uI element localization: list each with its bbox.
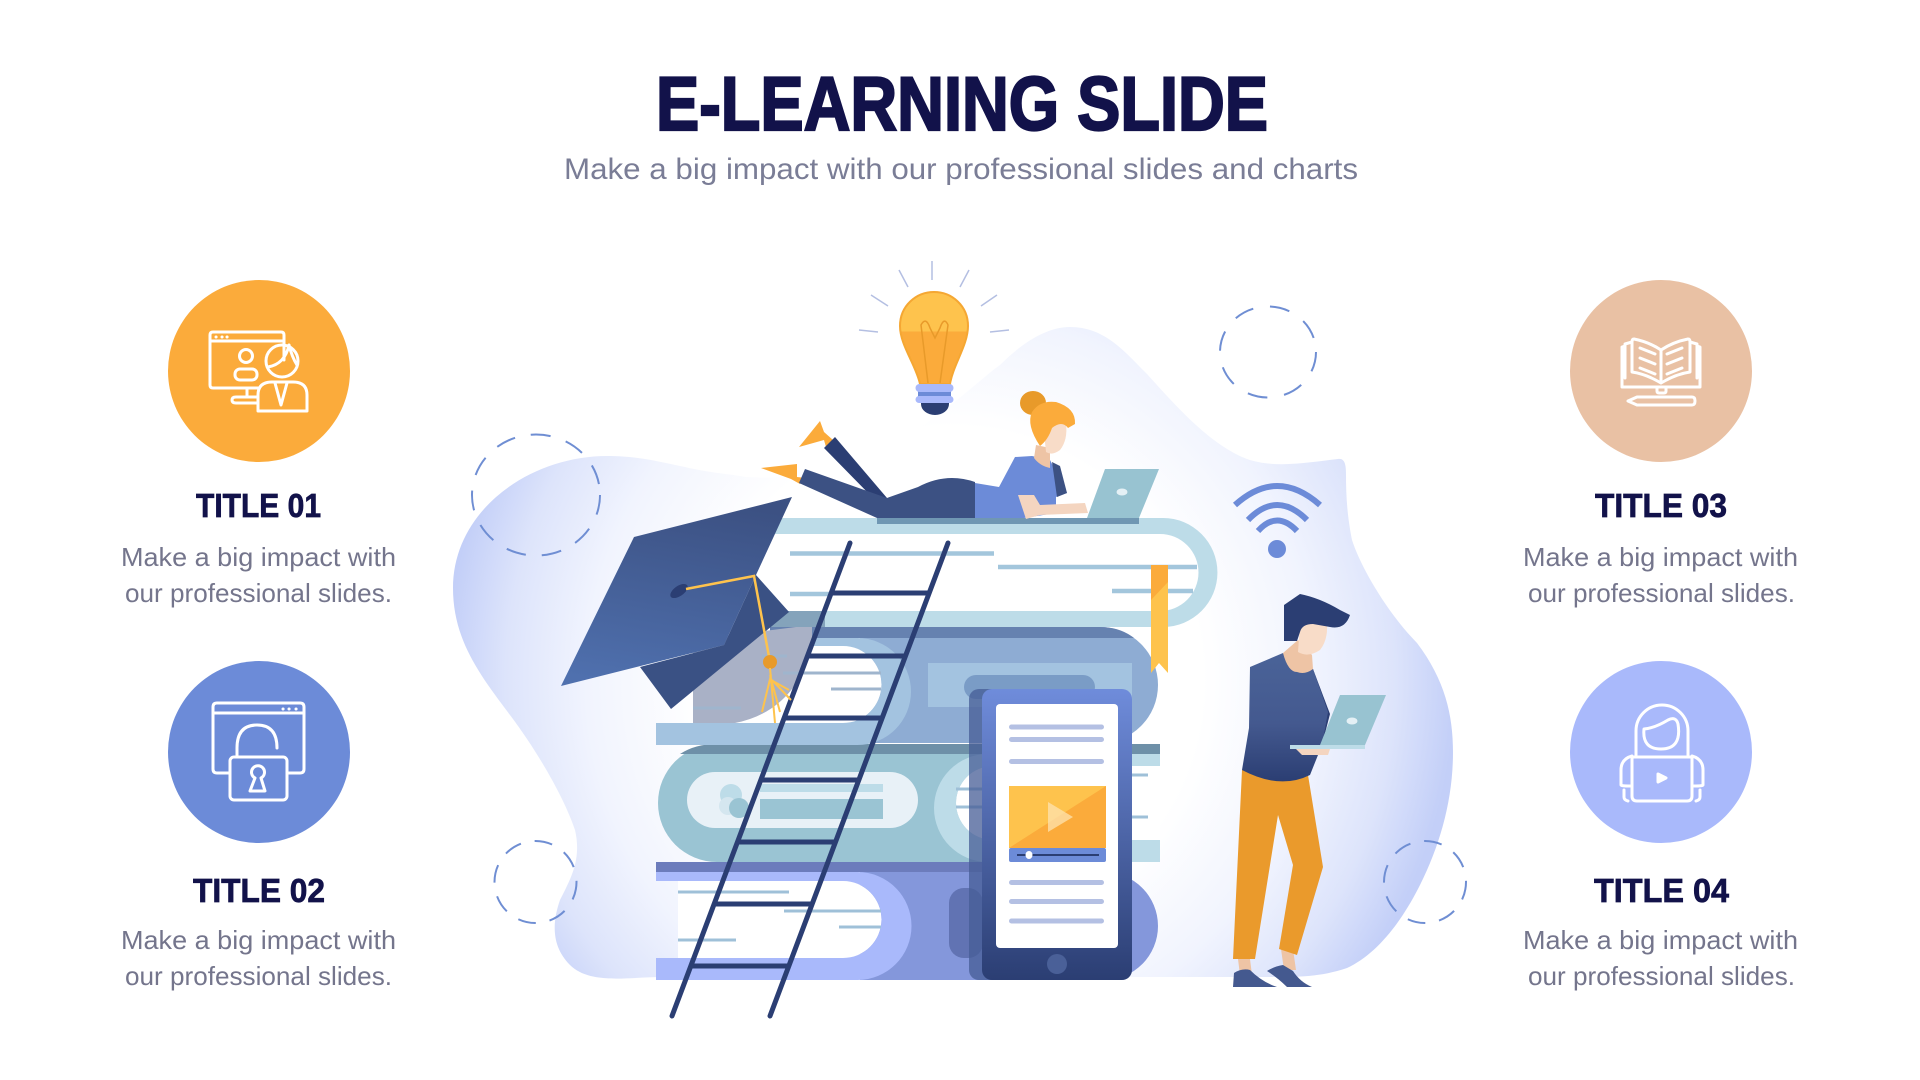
description: Make a big impact with <box>121 925 396 955</box>
central illustration <box>453 261 1466 1016</box>
description: our professional slides. <box>125 961 392 991</box>
ladder <box>672 543 948 1016</box>
description <box>121 542 396 608</box>
dashed circle upper right <box>1220 306 1316 398</box>
description <box>1523 542 1798 608</box>
description: our professional slides. <box>125 578 392 608</box>
icon: blue circle with browser lock <box>168 661 350 843</box>
book 3: teal <box>658 744 1160 862</box>
man standing with laptop <box>1233 594 1386 987</box>
video thumbnail <box>1009 786 1106 862</box>
book 1: top light blue <box>745 518 1217 627</box>
description: Make a big impact with <box>1523 925 1798 955</box>
dashed circle lower right <box>1384 841 1466 923</box>
tassel <box>762 655 791 723</box>
description <box>121 925 396 991</box>
panel: title 01 <box>121 280 396 608</box>
description: Make a big impact with <box>1523 542 1798 572</box>
description: our professional slides. <box>1528 961 1795 991</box>
heading: TITLE 04 <box>1594 872 1730 909</box>
description <box>1523 925 1798 991</box>
heading: TITLE 03 <box>1595 487 1727 524</box>
graduation cap <box>561 497 792 709</box>
icon: light bulb <box>859 261 1009 415</box>
panel: title 02 <box>121 661 396 991</box>
panel: title 03 <box>1523 280 1798 608</box>
subtitle: Make a big impact with our professional slides and charts <box>564 153 1358 186</box>
dashed circle lower left <box>494 841 576 923</box>
book 4: periwinkle <box>656 862 1158 980</box>
icon: wifi signal <box>1235 486 1320 558</box>
heading: TITLE 01 <box>196 487 321 524</box>
woman lying on books with laptop <box>761 391 1159 524</box>
icon: peach circle with open book <box>1570 280 1752 462</box>
description: our professional slides. <box>1528 578 1795 608</box>
panel: title 04 <box>1523 661 1798 991</box>
bookmark <box>1151 565 1168 673</box>
description: Make a big impact with <box>121 542 396 572</box>
icon: lavender circle with student at laptop <box>1570 661 1752 843</box>
phone with video player <box>969 689 1132 980</box>
background blob <box>453 327 1453 979</box>
dashed circle upper left <box>472 434 600 556</box>
heading: TITLE 02 <box>193 872 325 909</box>
book 2: blue <box>656 625 1158 745</box>
title: E-LEARNING SLIDE <box>656 62 1268 147</box>
icon: orange circle with online teacher <box>168 280 350 462</box>
